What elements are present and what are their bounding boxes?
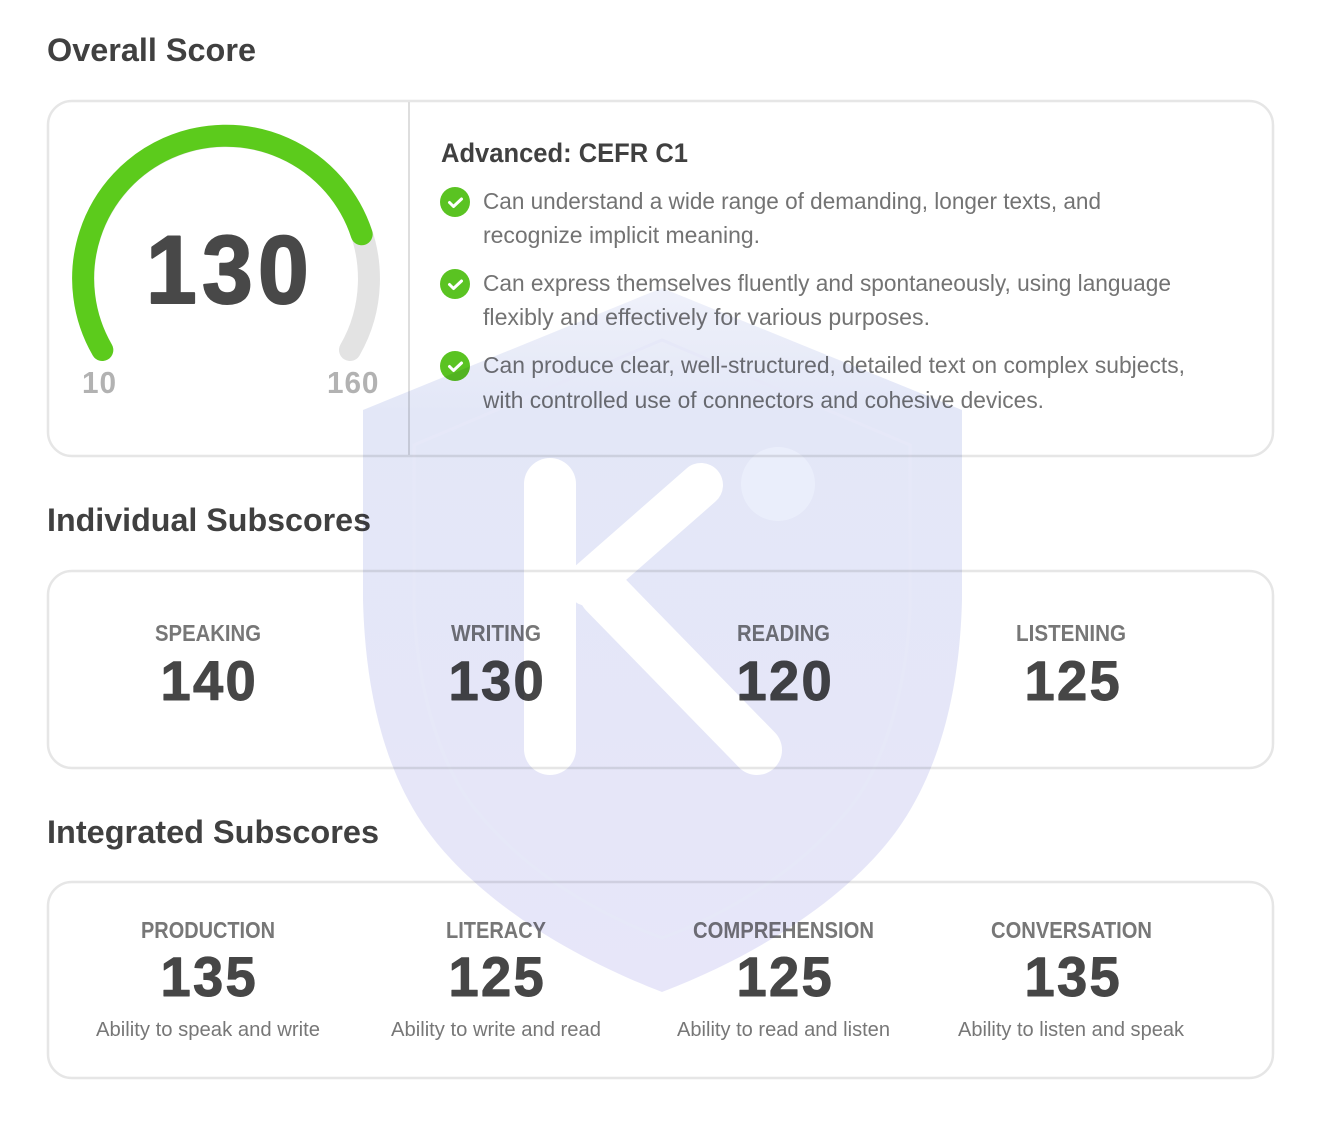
- list item: expression: Can express themselves fluently and spontaneously, using language: [483, 270, 1171, 296]
- score: production: [96, 917, 320, 1041]
- chart: score gauge: 10: [82, 365, 116, 400]
- heading: CEFR level: Advanced: CEFR C1: [441, 138, 688, 168]
- list item: expression: [440, 269, 1171, 330]
- list item: understanding: Can understand a wide range of demanding, longer texts, and: [483, 188, 1101, 214]
- score: literacy: 125: [448, 945, 544, 1008]
- score: production: 135: [160, 945, 256, 1008]
- score: comprehension: 125: [736, 945, 832, 1008]
- score: comprehension: [677, 917, 890, 1041]
- panel: individual subscores: [48, 571, 1273, 768]
- panel: integrated subscores: [48, 882, 1273, 1078]
- heading: Integrated Subscores: Integrated Subscores: [47, 814, 379, 850]
- score: production: Ability to speak and write: [96, 1019, 320, 1041]
- list item: production: Can produce clear, well-structured, detailed text on complex subjects,: [483, 352, 1185, 378]
- score: speaking: SPEAKING: [155, 620, 261, 646]
- score: comprehension: COMPREHENSION: [693, 917, 874, 943]
- chart: score gauge: [82, 136, 379, 400]
- heading: Individual Subscores: Individual Subscores: [47, 502, 371, 538]
- list item: production: with controlled use of connectors and cohesive devices.: [482, 387, 1044, 413]
- score: literacy: [391, 917, 601, 1041]
- score: literacy: Ability to write and read: [391, 1019, 601, 1041]
- score: production: PRODUCTION: [141, 917, 275, 943]
- list item: understanding: [440, 187, 1101, 248]
- score: conversation: [958, 917, 1185, 1041]
- score: speaking: [155, 620, 261, 712]
- score: listening: 125: [1024, 649, 1120, 712]
- score: conversation: Ability to listen and speak: [958, 1019, 1185, 1041]
- score: literacy: LITERACY: [446, 917, 546, 943]
- score: reading: READING: [737, 620, 830, 646]
- score: conversation: CONVERSATION: [991, 917, 1152, 943]
- score: listening: [1016, 620, 1126, 712]
- score: writing: [448, 620, 544, 712]
- score: comprehension: Ability to read and listen: [677, 1019, 890, 1041]
- list item: production: [440, 351, 1185, 413]
- score: speaking: 140: [160, 649, 256, 712]
- chart: score gauge: 130: [146, 215, 309, 324]
- score: reading: 120: [736, 649, 832, 712]
- panel: overall score: [48, 101, 1273, 456]
- list item: expression: flexibly and effectively for various purposes.: [483, 304, 930, 330]
- score: writing: WRITING: [451, 620, 541, 646]
- score: conversation: 135: [1024, 945, 1120, 1008]
- score: listening: LISTENING: [1016, 620, 1126, 646]
- list item: understanding: recognize implicit meaning.: [483, 222, 760, 248]
- chart: score gauge: 160: [327, 365, 379, 400]
- score: reading: [736, 620, 832, 712]
- heading: Overall Score: Overall Score: [47, 32, 256, 68]
- score: writing: 130: [448, 649, 544, 712]
